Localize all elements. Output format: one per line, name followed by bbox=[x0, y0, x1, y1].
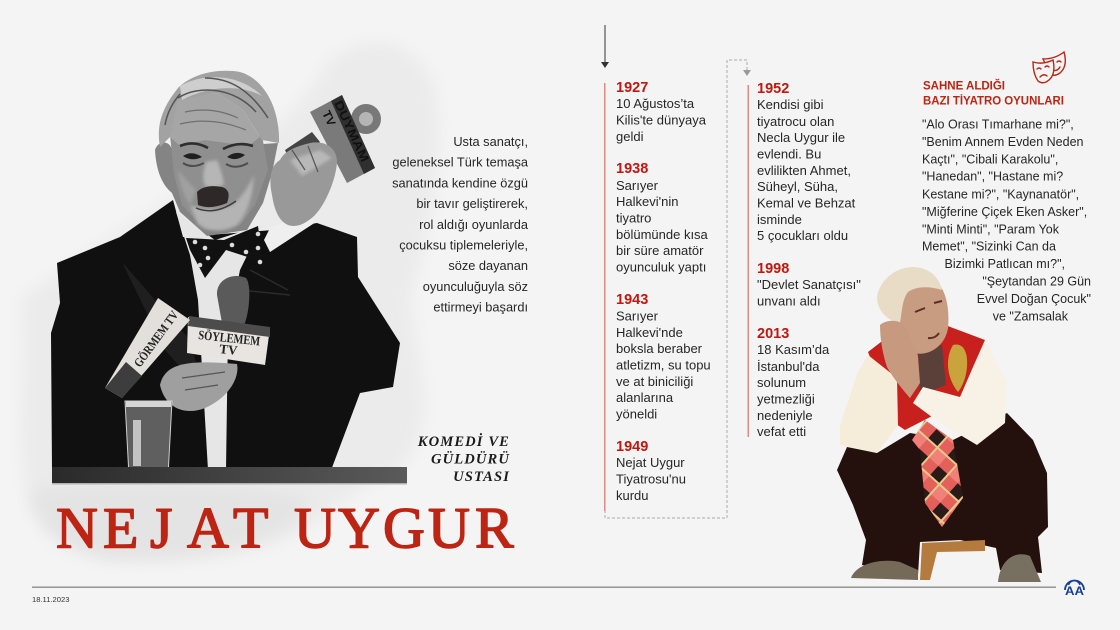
head bbox=[896, 273, 948, 354]
list of plays: Kaçtı", "Cibali Karakolu", bbox=[922, 152, 1058, 166]
entry 1943: yöneldi bbox=[616, 406, 657, 422]
entry 2013: solunum bbox=[757, 375, 806, 390]
entry 2013: 18 Kasım’da bbox=[757, 342, 830, 357]
entry 1952: tiyatrocu olan bbox=[757, 114, 834, 129]
entry 2013: 2013 bbox=[757, 326, 789, 342]
entry 2013: İstanbul'da bbox=[757, 359, 820, 374]
subtitle bbox=[417, 433, 510, 485]
entry 1943: Sarıyer bbox=[616, 308, 659, 324]
intro paragraph bbox=[392, 134, 529, 315]
entry 1938 bbox=[616, 161, 709, 274]
entry 2013 bbox=[757, 326, 830, 439]
subtitle: KOMEDİ VE bbox=[417, 433, 510, 450]
lower hand bbox=[160, 362, 237, 411]
entry 1952 bbox=[757, 81, 856, 243]
Söylemem TV mic: SÖYLEMEM bbox=[198, 327, 261, 348]
plaid tie bbox=[912, 420, 963, 527]
trousers bbox=[837, 413, 1048, 575]
intro paragraph: bir tavır geliştirerek, bbox=[416, 196, 528, 211]
entry 1943 bbox=[616, 292, 711, 422]
entry 1938: tiyatro bbox=[616, 210, 651, 226]
entry 1927: geldi bbox=[616, 129, 644, 144]
list of plays: "Alo Orası Tımarhane mi?", bbox=[922, 118, 1074, 132]
heading: plays: SAHNE ALDIĞI bbox=[923, 78, 1005, 92]
hands bbox=[880, 321, 920, 398]
list of plays: "Şeytandan 29 Gün bbox=[982, 274, 1091, 288]
entry 1998: 1998 bbox=[757, 261, 789, 277]
entry 1952: Necla Uygur ile bbox=[757, 130, 845, 145]
icon: theatre masks bbox=[1033, 52, 1065, 83]
stool bbox=[920, 540, 985, 580]
list of plays: Evvel Doğan Çocuk" bbox=[977, 292, 1091, 306]
eyebrows bbox=[180, 143, 253, 149]
entry 1949: 1949 bbox=[616, 439, 648, 455]
intro paragraph: söze dayanan bbox=[448, 258, 528, 273]
entry 1927: 1927 bbox=[616, 80, 648, 96]
entry 1943: 1943 bbox=[616, 292, 648, 308]
entry 1943: ve at biniciliği bbox=[616, 374, 693, 389]
eyes bbox=[183, 153, 245, 159]
entry 1998: unvanı aldı bbox=[757, 294, 821, 308]
intro paragraph: ettirmeyi başardı bbox=[433, 300, 528, 315]
entry 1943: atletizm, su topu bbox=[616, 358, 711, 372]
hair bbox=[159, 71, 279, 147]
Duymam TV mic: TV bbox=[319, 108, 338, 128]
entry 1938: Halkevi'nin bbox=[616, 194, 678, 209]
eyes and smile bbox=[915, 301, 942, 338]
entry 1938: bölümünde kısa bbox=[616, 227, 709, 242]
date: 18.11.2023 bbox=[32, 595, 69, 604]
photo: Nejat Uygur in suit with microphones bbox=[51, 71, 407, 484]
entry 2013: nedeniyle bbox=[757, 408, 813, 423]
timeline column 1 bbox=[604, 80, 711, 511]
neck shadow bbox=[918, 345, 946, 395]
subtitle: GÜLDÜRÜ bbox=[431, 450, 510, 468]
intro paragraph: sanatında kendine özgü bbox=[392, 175, 528, 190]
shoes bbox=[851, 561, 918, 580]
Söylemem TV mic bbox=[187, 276, 270, 365]
jacket bbox=[51, 200, 400, 473]
list of plays: "Minti Minti", "Param Yok bbox=[922, 222, 1060, 236]
intro paragraph: rol aldığı oyunlarda bbox=[419, 217, 529, 232]
entry 2013: vefat etti bbox=[757, 424, 806, 439]
entry 1949: Tiyatrosu'nu bbox=[616, 472, 686, 486]
timeline connector arrows bbox=[601, 25, 751, 518]
photo: Nejat Uygur in folk costume bbox=[837, 267, 1048, 582]
nose bbox=[203, 160, 224, 188]
entry 1952: 1952 bbox=[757, 81, 789, 97]
table bbox=[52, 467, 407, 484]
Söylemem TV mic: TV bbox=[219, 341, 239, 358]
entry 1943: boksla beraber bbox=[616, 341, 703, 356]
entry 1949 bbox=[616, 439, 686, 503]
entry 1952: evlilikten Ahmet, bbox=[757, 163, 851, 178]
list of plays: Bizimki Patlıcan mı?", bbox=[945, 257, 1065, 271]
entry 1998 bbox=[757, 261, 861, 308]
list of plays: "Benim Annem Evden Neden bbox=[922, 135, 1084, 149]
heading: plays: BAZI TİYATRO OYUNLARI bbox=[923, 92, 1064, 108]
list of plays: Kestane mi?", "Kaynanatör", bbox=[922, 188, 1079, 202]
entry 1938: oyunculuk yaptı bbox=[616, 260, 706, 274]
toothbrush moustache bbox=[197, 186, 229, 207]
Görmem TV mic: GÖRMEM TV bbox=[131, 308, 181, 370]
hair bbox=[877, 267, 942, 323]
timeline column 2 bbox=[748, 81, 861, 439]
intro paragraph: Usta sanatçı, bbox=[453, 134, 528, 149]
shirt bbox=[840, 355, 898, 453]
entry 1952: Kemal ve Behzat bbox=[757, 196, 856, 210]
entry 1943: alanlarına bbox=[616, 390, 674, 405]
entry 1927: 10 Ağustos’ta bbox=[616, 96, 695, 111]
polka dot bow tie bbox=[186, 226, 263, 278]
list of plays: "Miğferine Çiçek Eken Asker", bbox=[922, 205, 1087, 219]
shirt bbox=[176, 212, 262, 470]
entry 1938: Sarıyer bbox=[616, 178, 659, 193]
intro paragraph: geleneksel Türk temaşa bbox=[392, 155, 529, 170]
entry 1952: 5 çocukları oldu bbox=[757, 228, 848, 243]
intro paragraph: çocuksu tiplemeleriyle, bbox=[399, 238, 528, 252]
list of plays: ve "Zamsalak bbox=[993, 310, 1069, 324]
intro paragraph: oyunculuğuyla söz bbox=[423, 279, 528, 294]
entry 1927 bbox=[616, 80, 707, 144]
Duymam TV mic bbox=[285, 95, 381, 183]
subtitle: USTASI bbox=[453, 469, 510, 485]
water glass bbox=[125, 401, 172, 476]
footer rule bbox=[32, 586, 1056, 588]
list of plays: "Hanedan", "Hastane mi? bbox=[922, 170, 1063, 184]
title: NEJAT UYGUR bbox=[56, 496, 514, 560]
entry 1952: evlendi. Bu bbox=[757, 146, 821, 162]
entry 1952: isminde bbox=[757, 212, 802, 227]
entry 1943: Halkevi'nde bbox=[616, 325, 683, 340]
Duymam TV mic: DUYMAM bbox=[331, 98, 372, 164]
heading: plays bbox=[923, 78, 1064, 108]
chin and cheek bbox=[190, 175, 254, 231]
head and face bbox=[155, 71, 279, 236]
entry 1952: Süheyl, Süha, bbox=[757, 179, 838, 194]
entry 1952: Kendisi gibi bbox=[757, 97, 824, 112]
entry 1998: "Devlet Sanatçısı" bbox=[757, 277, 861, 292]
entry 1949: kurdu bbox=[616, 488, 649, 503]
list of plays: Memet", "Sizinki Can da bbox=[922, 240, 1056, 254]
entry 1927: Kilis'te dünyaya bbox=[616, 112, 707, 128]
forehead bbox=[170, 93, 260, 146]
vest bbox=[868, 325, 985, 430]
list of plays bbox=[922, 118, 1091, 324]
entry 2013: yetmezliği bbox=[757, 392, 815, 406]
Görmem TV mic bbox=[105, 298, 190, 398]
entry 1938: 1938 bbox=[616, 161, 648, 177]
entry 1938: bir süre amatör bbox=[616, 243, 704, 258]
raised hand and cuff bbox=[264, 214, 316, 252]
entry 1949: Nejat Uygur bbox=[616, 455, 685, 470]
AA logo: AA bbox=[1065, 584, 1084, 598]
